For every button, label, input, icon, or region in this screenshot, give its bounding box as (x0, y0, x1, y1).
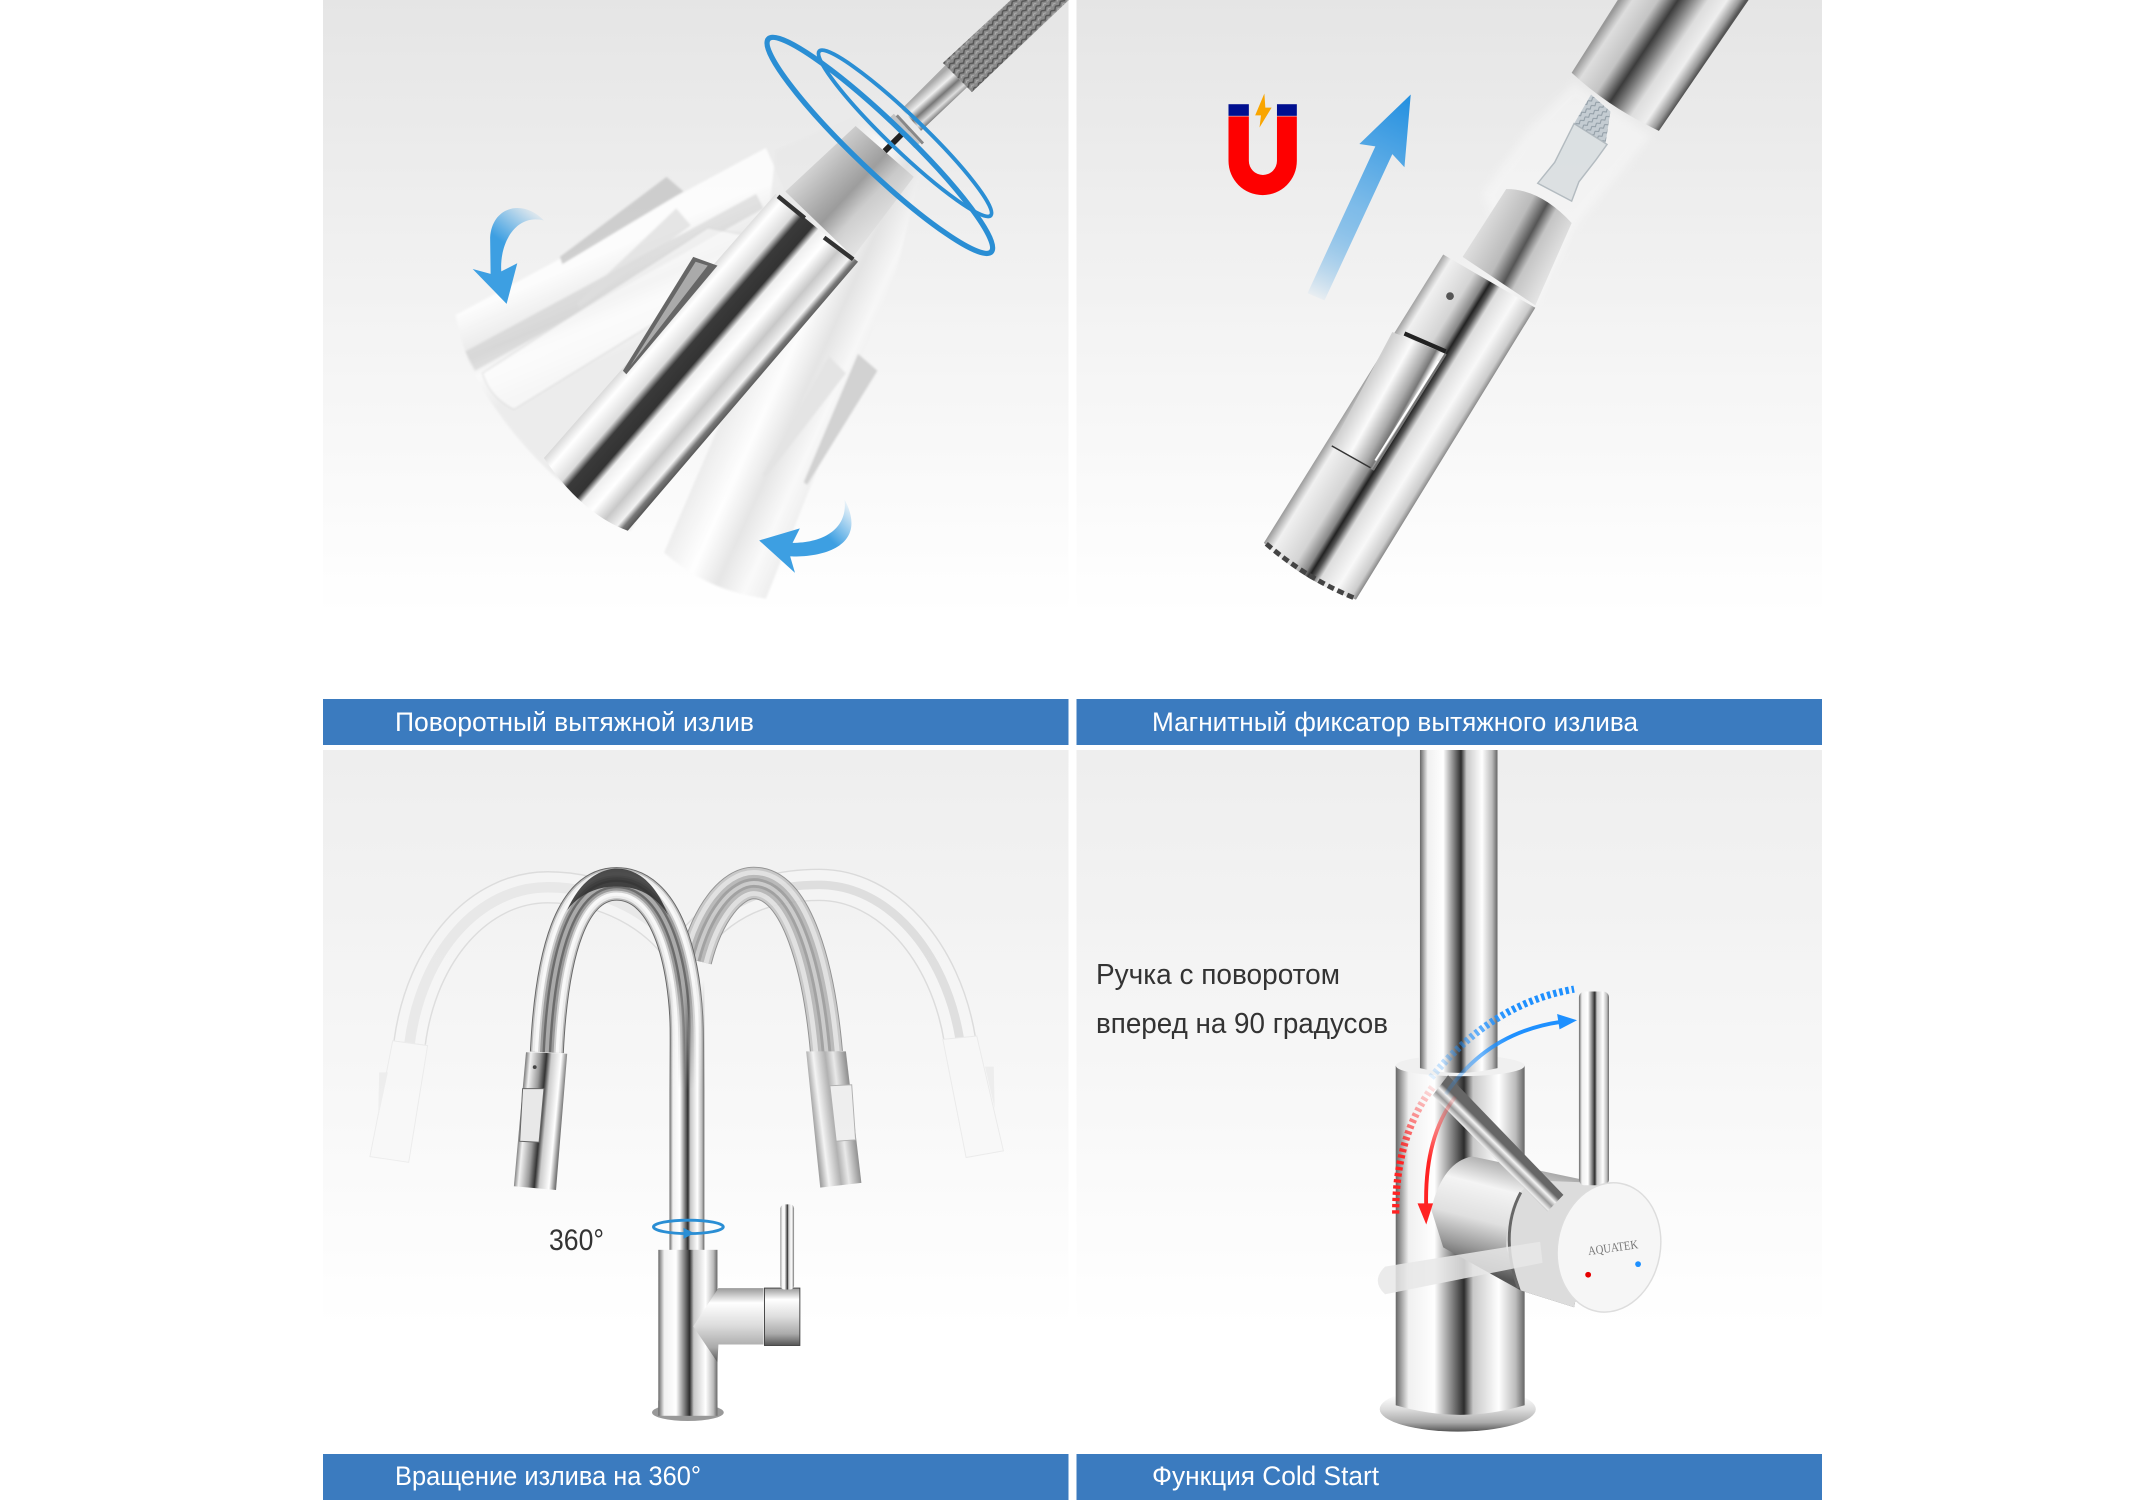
hose fitting (902, 65, 967, 131)
arrow: curved left (473, 208, 544, 304)
sprayer button (623, 257, 717, 374)
caption bar: magnetic (1076, 699, 1822, 745)
sprayer small hole (1446, 292, 1454, 300)
spout in rim (1420, 1018, 1498, 1073)
inner hose (1574, 95, 1610, 143)
sprayer button (1332, 332, 1446, 470)
blue rotation ring large (751, 21, 1009, 270)
side cylinder (1431, 1157, 1598, 1307)
cold marker (1635, 1261, 1641, 1267)
button slot (1404, 333, 1446, 351)
side cylinder ring (1509, 1192, 1521, 1288)
motion blur behind hose (1482, 82, 1652, 305)
panel: magnetic holder (1076, 0, 1822, 699)
panel: 360 rotation (323, 750, 1068, 1454)
callout text (1096, 959, 1388, 1040)
dashed red arc (1396, 1087, 1433, 1216)
hot marker (1585, 1272, 1591, 1278)
arrow: curved bottom (759, 499, 851, 573)
lever diagonal position (1433, 1075, 1563, 1212)
hose connector (1538, 124, 1607, 201)
faucet foot (1380, 1387, 1536, 1432)
spray head dot (533, 1065, 537, 1069)
panel: swivel pull-out spout (323, 0, 1069, 699)
illustration: cold start faucet (1378, 750, 1671, 1432)
spout tube (1420, 750, 1498, 1070)
central sprayer body (544, 194, 858, 531)
side cylinder shade (1506, 1180, 1598, 1307)
ghost spout far right (693, 885, 1003, 1158)
callout text: вперед на 90 градусов (1096, 1008, 1388, 1040)
illustration: rotating sprayer head (456, 0, 1069, 599)
illustration: magnetic sprayer (1228, 0, 1749, 600)
callout text: Ручка с поворотом (1096, 959, 1340, 991)
caption text: Магнитный фиксатор вытяжного излива (1152, 707, 1639, 737)
brand on cap: AQUATEK (1587, 1237, 1639, 1258)
spout end (1572, 0, 1749, 131)
faucet neck (693, 1288, 764, 1362)
body top rim (1396, 1055, 1525, 1076)
hose collar (885, 115, 923, 151)
label: 360 degrees: 360° (549, 1224, 604, 1257)
lever upright position (1579, 992, 1609, 1185)
faucet body (658, 1250, 717, 1415)
caption text: Поворотный вытяжной излив (395, 707, 754, 737)
faucet body (1396, 1056, 1525, 1415)
faucet foot (652, 1404, 724, 1421)
illustration: faucet with rotating spout (370, 869, 1003, 1421)
blue rotation ring small (807, 39, 1003, 228)
rotation ring (653, 1220, 723, 1239)
sprayer dark ring (778, 196, 853, 259)
caption text: Вращение излива на 360° (395, 1461, 701, 1491)
arrow: red (1418, 1097, 1455, 1224)
handle lever (780, 1204, 794, 1290)
handle cap (764, 1288, 800, 1345)
caption text: Функция Cold Start (1152, 1461, 1379, 1491)
sprayer body (1264, 254, 1535, 600)
panel: cold start (1076, 750, 1822, 1454)
ghost spout right (696, 883, 861, 1188)
ghost spout far left (370, 887, 688, 1162)
arrow: blue (1446, 1014, 1577, 1094)
spray head button (520, 1089, 544, 1142)
lever ghost position (1378, 1242, 1543, 1294)
aerator holes (1266, 544, 1356, 599)
caption bar: 360 rotation (323, 1454, 1068, 1500)
dashed blue arc (1431, 989, 1574, 1078)
handle cap (1547, 1175, 1671, 1320)
sprayer neck (1463, 189, 1572, 305)
main spout (547, 869, 704, 1252)
caption bar: swivel (323, 699, 1068, 745)
foot highlight (658, 1400, 717, 1416)
infographic canvas (323, 0, 1822, 1500)
ghost sprayer positions (456, 116, 921, 599)
icon: magnet (1228, 94, 1297, 195)
caption bar: cold start (1076, 1454, 1822, 1500)
spray head (514, 1052, 567, 1190)
upper cone of sprayer (785, 126, 914, 257)
braided hose (943, 0, 1069, 92)
arrow: upward (1308, 95, 1411, 301)
